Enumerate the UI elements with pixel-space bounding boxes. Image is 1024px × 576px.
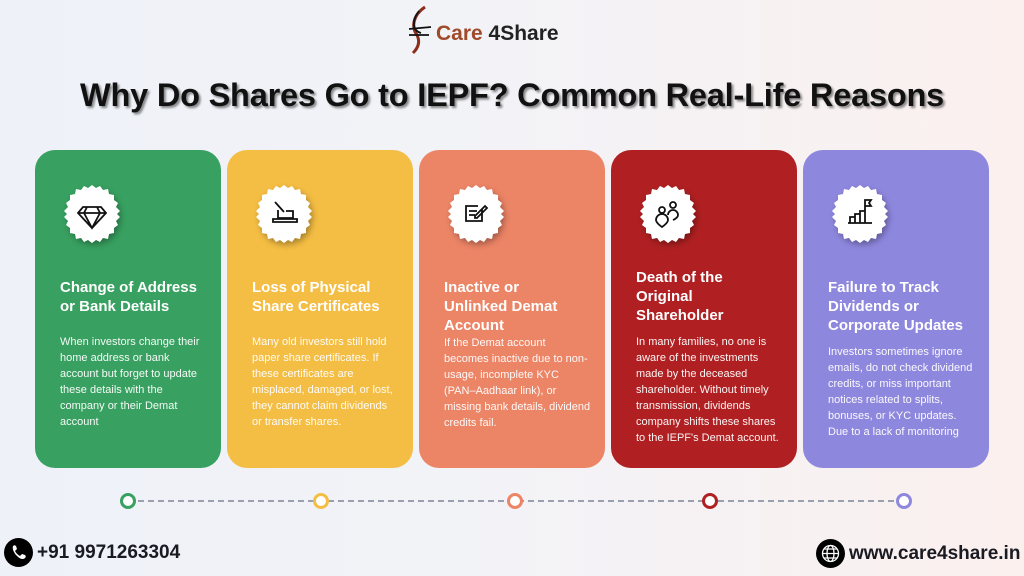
phone contact: +91 9971263304 xyxy=(37,542,180,563)
card 3 xyxy=(419,150,605,468)
body: In many families, no one is aware of the investments made by the deceased shareholder. Without timely transmission, dividends company shifts these shares to the IEPF's Demat account. xyxy=(636,336,779,444)
body: If the Demat account becomes inactive due to non-usage, incomplete KYC (PAN–Aadhaar link), or missing bank details, dividend credits fail. xyxy=(444,337,590,429)
heading: Death of the Original Shareholder xyxy=(636,269,724,324)
icon: diamond xyxy=(64,185,124,248)
timeline xyxy=(120,493,912,509)
icon: certificate xyxy=(256,185,316,248)
icon: phone xyxy=(4,538,33,567)
body: Investors sometimes ignore emails, do not check dividend credits, or miss important notices related to splits, bonuses, or KYC updates. Due to a lack of monitoring xyxy=(828,346,972,438)
card 1 xyxy=(35,150,221,468)
dot 3 xyxy=(507,493,523,509)
dot 1 xyxy=(120,493,136,509)
heading: Failure to Track Dividends or Corporate Updates xyxy=(828,279,963,334)
dot 5 xyxy=(896,493,912,509)
icon: growth flag xyxy=(832,185,892,248)
card 5 xyxy=(803,150,989,468)
icon: people xyxy=(640,185,700,248)
website contact: www.care4share.in xyxy=(849,543,1020,564)
body: When investors change their home address or bank account but forget to update these details with the company or their Demat account xyxy=(60,336,199,428)
phone contact xyxy=(4,538,180,567)
icon: globe xyxy=(816,539,845,568)
card 4 xyxy=(611,150,797,468)
heading: Change of Address or Bank Details xyxy=(60,279,197,315)
website contact xyxy=(816,539,1020,568)
title: Why Do Shares Go to IEPF? Common Real-Life Reasons xyxy=(80,77,944,113)
icon: edit xyxy=(448,185,508,248)
dot 4 xyxy=(702,493,718,509)
heading: Inactive or Unlinked Demat Account xyxy=(444,279,557,334)
body: Many old investors still hold paper share certificates. If these certificates are misplaced, damaged, or lost, they cannot claim dividends or transfer shares. xyxy=(252,336,393,428)
logo xyxy=(408,6,559,54)
heading: Loss of Physical Share Certificates xyxy=(252,279,380,315)
logo: Care 4Share xyxy=(436,22,559,45)
dot 2 xyxy=(313,493,329,509)
card 2 xyxy=(227,150,413,468)
